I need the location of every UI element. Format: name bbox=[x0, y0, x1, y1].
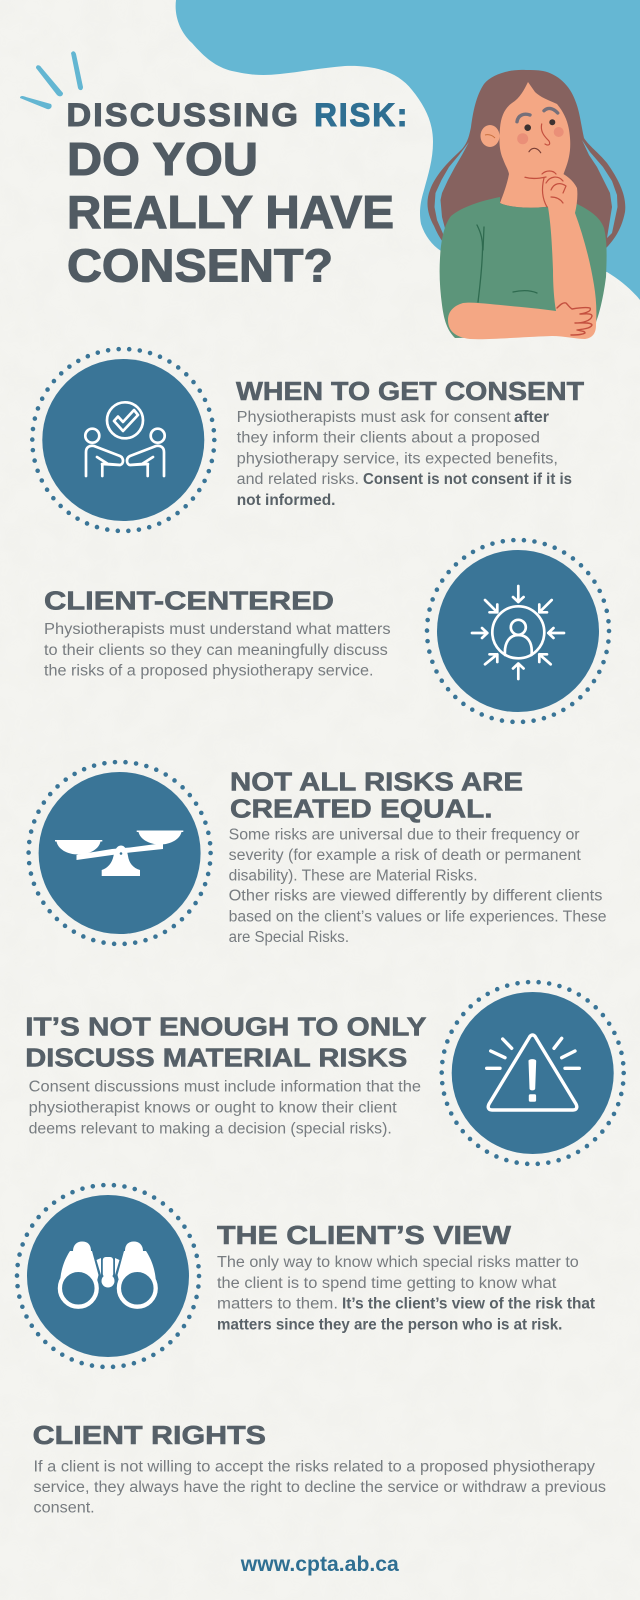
body text: Physiotherapists must understand what matters bbox=[44, 621, 391, 638]
body text: matters since they are the person who is at risk. bbox=[217, 1316, 562, 1333]
shirt creases bbox=[477, 225, 537, 302]
body text bbox=[34, 1458, 606, 1517]
body text: and related risks. bbox=[237, 471, 359, 488]
body text: they inform their clients about a proposed bbox=[237, 430, 540, 447]
heading: CLIENT RIGHTS bbox=[33, 1420, 266, 1450]
heading: CLIENT-CENTERED bbox=[44, 586, 334, 616]
body text: The only way to know which special risks matter to bbox=[217, 1254, 579, 1271]
body text bbox=[229, 826, 606, 946]
body text bbox=[44, 621, 391, 680]
body text: the risks of a proposed physiotherapy service. bbox=[44, 662, 373, 680]
body text: physiotherapist knows or ought to know their client bbox=[29, 1099, 397, 1116]
body text: disability). These are Material Risks. bbox=[229, 867, 478, 884]
section: not all risks are created equal bbox=[29, 762, 607, 946]
body text: severity (for example a risk of death or permanent bbox=[229, 847, 582, 864]
body text: are Special Risks. bbox=[229, 929, 349, 946]
facial features bbox=[517, 108, 592, 335]
decorative sparks bbox=[20, 51, 83, 109]
body text: If a client is not willing to accept the risks related to a proposed physiotherapy bbox=[34, 1458, 595, 1475]
body text: It’s the client’s view of the risk that bbox=[342, 1295, 595, 1312]
arms and hands bbox=[448, 171, 596, 339]
heading: NOT ALL RISKS ARE bbox=[230, 767, 523, 797]
icon: two people and check mark bbox=[32, 349, 214, 531]
ear bbox=[480, 125, 500, 147]
heading: THE CLIENT’S VIEW bbox=[217, 1220, 512, 1250]
icon: warning triangle bbox=[442, 982, 624, 1164]
body text: Other risks are viewed differently by different clients bbox=[229, 888, 603, 905]
section: client-centered bbox=[44, 540, 609, 722]
blue background blob bbox=[176, 0, 640, 300]
heading: DISCUSS MATERIAL RISKS bbox=[25, 1043, 407, 1073]
heading bbox=[25, 1012, 427, 1073]
section: when to get consent bbox=[32, 349, 584, 531]
face and neck bbox=[499, 82, 570, 208]
body text: Consent discussions must include information that the bbox=[29, 1079, 421, 1096]
footer website: www.cpta.ab.ca bbox=[240, 1553, 399, 1576]
title: CONSENT? bbox=[67, 240, 333, 292]
section: the client's view bbox=[17, 1185, 595, 1367]
title: DO YOU bbox=[67, 133, 258, 185]
body text: after bbox=[514, 409, 549, 426]
body text: not informed. bbox=[237, 492, 336, 509]
heading: WHEN TO GET CONSENT bbox=[236, 376, 584, 406]
heading bbox=[230, 767, 523, 823]
body text: Physiotherapists must ask for consent bbox=[237, 409, 511, 426]
title bbox=[66, 97, 409, 292]
heading: CREATED EQUAL. bbox=[230, 793, 493, 823]
icon: person surrounded by arrows bbox=[427, 540, 609, 722]
body text bbox=[237, 409, 572, 509]
icon: balance scale bbox=[29, 762, 211, 944]
shirt bbox=[440, 197, 607, 338]
title: RISK: bbox=[314, 97, 409, 133]
heading: IT’S NOT ENOUGH TO ONLY bbox=[25, 1012, 427, 1042]
icon: binoculars bbox=[17, 1185, 199, 1367]
section: it's not enough to only discuss material risks bbox=[25, 982, 624, 1164]
section: client rights bbox=[33, 1420, 606, 1517]
body text: to their clients so they can meaningfully discuss bbox=[44, 642, 388, 659]
body text: consent. bbox=[34, 1500, 95, 1517]
body text: physiotherapy service, its expected benefits, bbox=[237, 450, 558, 467]
body text bbox=[217, 1254, 595, 1333]
title: REALLY HAVE bbox=[67, 186, 394, 238]
body text: based on the client’s values or life experiences. These bbox=[229, 909, 606, 926]
body text: Consent is not consent if it is bbox=[363, 471, 572, 488]
body text: Some risks are universal due to their frequency or bbox=[229, 826, 580, 843]
body text: the client is to spend time getting to know what bbox=[217, 1275, 557, 1292]
body text bbox=[29, 1079, 421, 1137]
illustration: thinking woman bbox=[427, 70, 625, 339]
body text: matters to them. bbox=[217, 1295, 338, 1312]
body text: deems relevant to making a decision (special risks). bbox=[29, 1120, 392, 1137]
title: DISCUSSING bbox=[66, 97, 300, 133]
body text: service, they always have the right to decline the service or withdraw a previous bbox=[34, 1479, 606, 1496]
